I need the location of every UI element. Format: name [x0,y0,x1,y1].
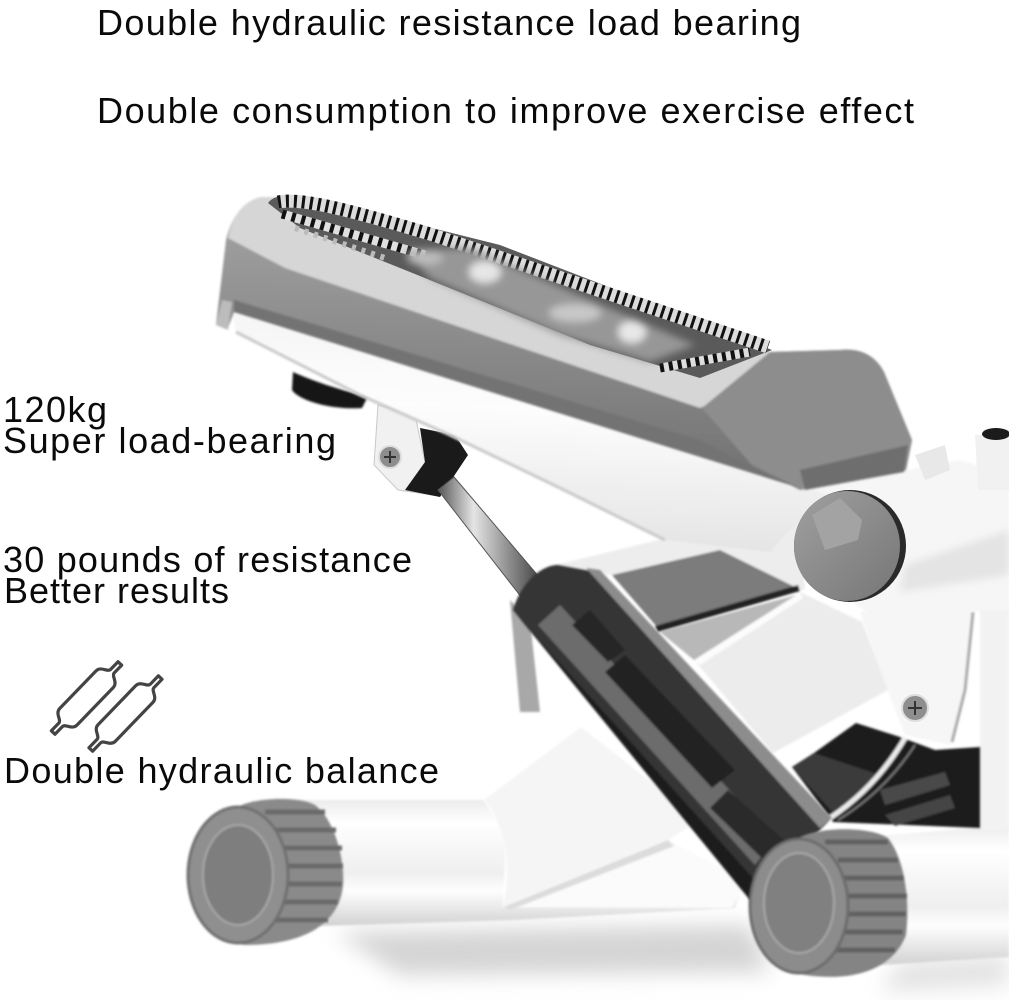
right upper tube [800,460,1009,615]
right screw [902,695,928,721]
blurred logo area [405,248,695,362]
label: 120kg: 120kg [3,389,107,430]
central bracket prism [694,592,975,753]
label: better results: Better results [4,570,229,611]
pedal grip mesh [268,195,772,378]
stepper machine photo [188,195,1009,977]
white pivot bracket [374,405,468,497]
heading line 2: Double consumption to improve exercise effect [97,90,914,131]
label: super load-bearing: Super load-bearing [3,420,336,461]
pedal underside [232,310,830,552]
dark panel behind cylinder [510,505,805,712]
left end knob [188,799,343,945]
hydraulic cylinder [513,565,832,900]
heading line 1: Double hydraulic resistance load bearing [97,2,801,43]
top right fixture [915,428,1009,490]
dark mechanism [792,723,980,828]
label: double hydraulic balance: Double hydraulic balance [4,750,439,791]
round end cap [794,490,906,602]
label: 30 pounds of resistance: 30 pounds of resistance [3,539,412,580]
piston rod [438,477,540,598]
icon: double hydraulic cylinders [45,655,169,758]
black adjusting knob [292,372,368,408]
right lower tube [880,825,1009,965]
right upright column [980,600,1009,830]
base tube [300,727,745,926]
ground shadow [335,925,1009,992]
pedal body [216,197,912,490]
right end knob [750,829,907,977]
